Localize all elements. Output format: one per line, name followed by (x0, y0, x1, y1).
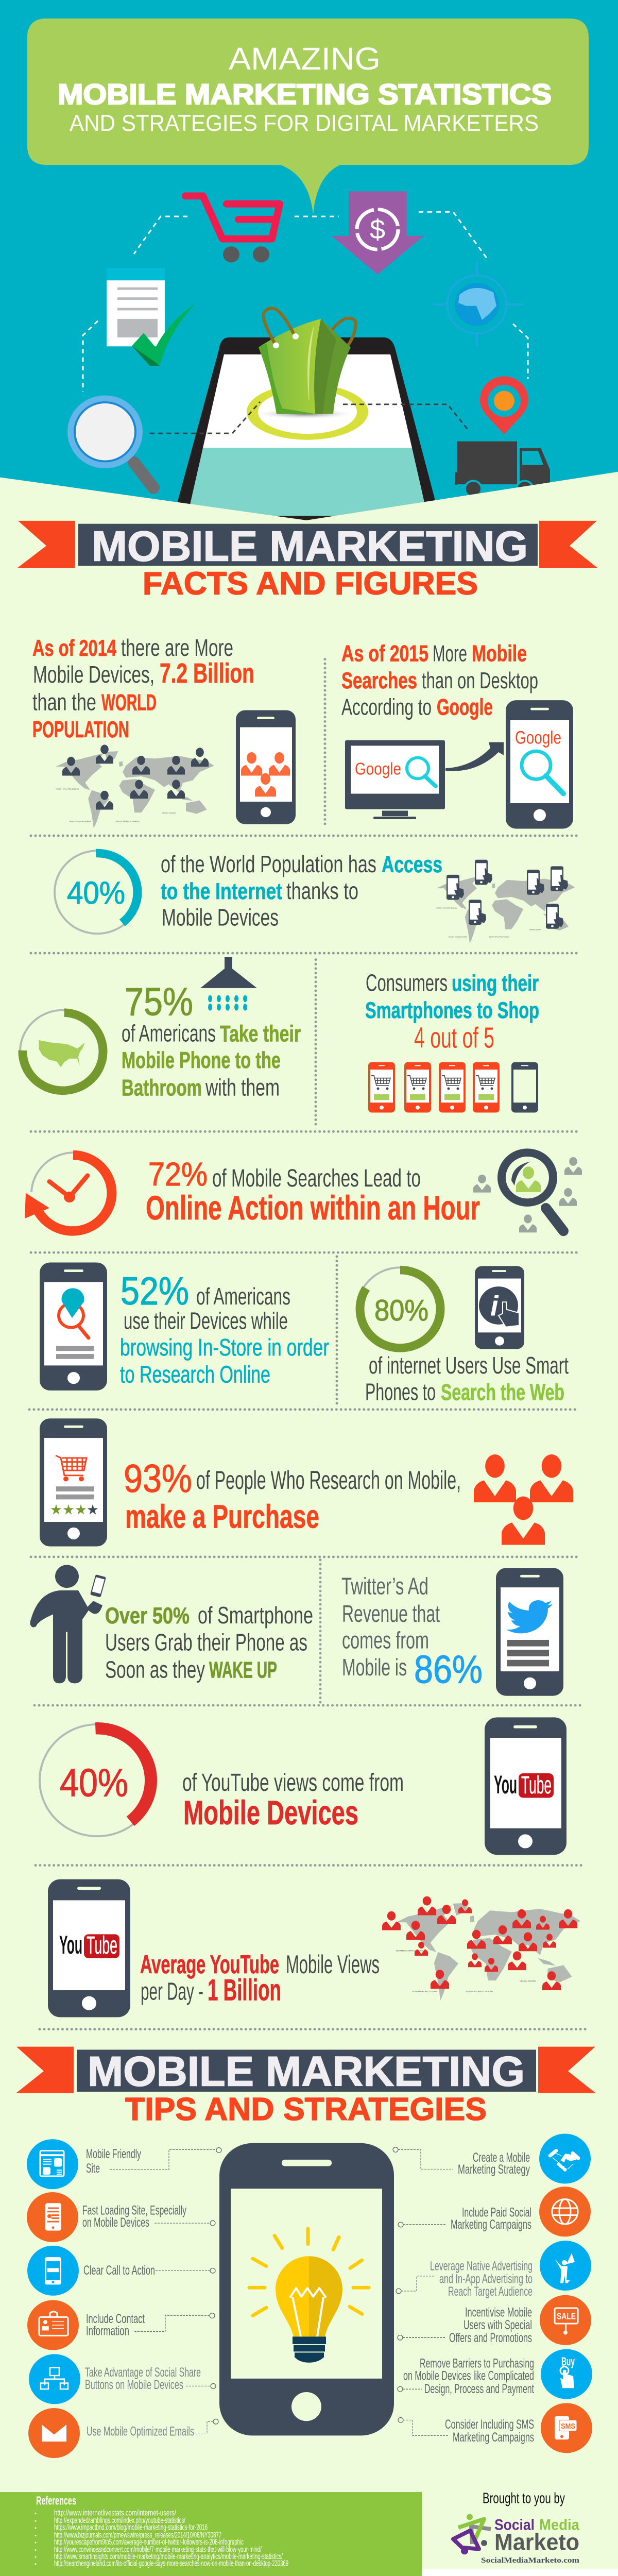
arrow from desktop to mobile (445, 742, 504, 771)
fact: 75 percent bathroom text (122, 980, 301, 1101)
fact: 4 out of 5 consumers text: Smartphones to Shop (365, 997, 539, 1023)
brought to you by credit and logo: SocialMediaMarketo.com (481, 2556, 580, 2565)
fact: twitter revenue text (341, 1573, 483, 1691)
tip: special offers: Incentivise Mobile (465, 2306, 532, 2319)
shopping bag (259, 308, 356, 414)
fact: twitter revenue text: comes from (342, 1627, 429, 1654)
phone with youtube logo (485, 1717, 566, 1855)
horizontal divider (29, 1408, 578, 1411)
section header: facts and figures (18, 521, 597, 601)
fact: 72 percent online action text: of Mobile Searches Lead to (212, 1164, 421, 1192)
phone with info touch icon: i (490, 1290, 499, 1321)
icon: purple dollar arrow: $ (370, 215, 385, 245)
icon: sms phone (555, 2416, 577, 2439)
icon: envelope (42, 2425, 66, 2442)
fact: more mobile searches text: According to (341, 694, 432, 720)
world map with red people (382, 1896, 580, 2001)
tip: special offers: Users with Special (464, 2318, 532, 2332)
fact: 52 percent in-store text (120, 1269, 329, 1388)
fact: 80 percent search text: Phones to (365, 1379, 436, 1405)
fact: 4 out of 5 consumers text (365, 970, 539, 1054)
horizontal divider (31, 835, 579, 837)
brought to you by credit and logo: Marketo (494, 2529, 579, 2555)
fact: 72 percent online action text (146, 1156, 480, 1227)
tip: fast loading site (27, 2192, 215, 2242)
tip: clear call to action: Clear Call to Action (83, 2263, 155, 2278)
icon: purple dollar arrow (332, 192, 424, 275)
fact: wake up text: WAKE UP (209, 1657, 277, 1683)
ring chart: 75 percent with USA map (20, 1010, 106, 1093)
icon: globe network (552, 2199, 578, 2224)
icon: sale sign (555, 2308, 578, 2334)
fact: 4 out of 5 consumers text: Consumers (366, 970, 448, 997)
tip: native and in-app advertising: and In-App Advertising to (439, 2272, 533, 2286)
phone with youtube logo 2: You (59, 1930, 82, 1959)
fact: 7.2 billion devices text: Mobile Devices, (33, 662, 154, 688)
phone with youtube logo 2: Tube (87, 1931, 117, 1959)
tip: create a mobile marketing strategy: Marketing Strategy (458, 2162, 530, 2177)
references panel: http://expandedramblings.com/index.php/youtube-statistics/ (54, 2516, 185, 2525)
tip: social share buttons: Take Advantage of Social Share (85, 2365, 201, 2380)
fact: 72 percent online action text: Online Action within an Hour (146, 1189, 480, 1227)
ring chart: 40 percent youtube views (40, 1724, 155, 1836)
fact: more mobile searches text: As of 2015 (341, 640, 428, 666)
fact: more mobile searches text: Google (437, 694, 493, 720)
icon: handshake (550, 2150, 578, 2172)
phone with cart and stars: ★★★ (50, 1501, 87, 1518)
fact: internet access text: thanks to (286, 878, 358, 905)
fact: 93 percent purchase text: 93% (124, 1457, 192, 1501)
fact: internet access text: to the Internet (161, 878, 282, 904)
icon: man with megaphone (555, 2253, 575, 2283)
fact: wake up text: Users Grab their Phone as (105, 1629, 307, 1656)
tip: include contact information: Information (86, 2324, 129, 2338)
icon: magnifying glass (67, 395, 153, 488)
world map with phones (436, 860, 575, 943)
icon: globe target (434, 261, 522, 347)
tip: create a mobile marketing strategy: Create a Mobile (473, 2150, 530, 2165)
tip: sms marketing campaigns (398, 2403, 592, 2453)
tip: mobile optimized emails (28, 2408, 218, 2458)
fact: twitter revenue text: Twitter’s Ad (341, 1573, 428, 1600)
fact: internet access text: of the World Population has (161, 851, 376, 878)
desktop monitor with google search: Google (355, 760, 401, 779)
fact: 7.2 billion devices text: As of 2014 (32, 635, 116, 661)
fact: 75 percent bathroom text: Mobile Phone to the (122, 1047, 281, 1073)
icon: man holding phone (30, 1565, 106, 1683)
tip: create a mobile marketing strategy (393, 2133, 591, 2183)
brought to you by credit and logo: Brought to you by (483, 2490, 565, 2506)
tip: native and in-app advertising: Reach Target Audience (448, 2284, 533, 2299)
brought to you by credit and logo (453, 2490, 580, 2565)
references panel: References (36, 2495, 76, 2507)
fact: 7.2 billion devices text: than the (32, 689, 96, 716)
icon: light bulb (249, 2229, 369, 2363)
phone with audience icon (236, 710, 296, 824)
fact: wake up text: of Smartphone (198, 1602, 313, 1629)
icon: phone button (45, 2257, 61, 2284)
speech bubble title panel: MOBILE MARKETING STATISTICS (58, 78, 552, 110)
vertical divider (314, 960, 317, 1128)
icon: id badge (39, 2312, 68, 2335)
references panel: https://www.impactbnd.com/blog/mobile-marketing-statistics-for-2016 (54, 2523, 208, 2532)
fact: 1 billion views text: per Day - (141, 1977, 203, 2005)
phone with youtube logo 2 (48, 1879, 130, 2017)
phone with info touch icon (475, 1266, 524, 1349)
dashed connector lines (83, 212, 528, 392)
fact: 52 percent in-store text: use their Devices while (124, 1308, 288, 1334)
tip: social share buttons (29, 2354, 216, 2404)
fact: youtube views text: of YouTube views come from (182, 1769, 404, 1797)
tip: social share buttons: Buttons on Mobile Devices (85, 2378, 183, 2392)
tip: native and in-app advertising (396, 2241, 591, 2299)
references panel: http://www.internetlivestats.com/internet-users/ (54, 2509, 176, 2518)
tip: mobile friendly site: Mobile Friendly (86, 2147, 141, 2161)
phone with google search (506, 700, 573, 828)
fact: twitter revenue text: 86% (414, 1648, 483, 1691)
phone with youtube logo: You (494, 1770, 517, 1799)
fact: wake up text: Soon as they (105, 1656, 205, 1684)
world map with people (56, 744, 214, 828)
fact: 80 percent search text: Search the Web (441, 1379, 564, 1405)
fact: 75 percent bathroom text: Bathroom (122, 1075, 202, 1100)
tip: include contact information (27, 2300, 215, 2350)
row of phones with carts (368, 1062, 538, 1112)
logo mark (453, 2514, 491, 2554)
phone with cart and stars (40, 1418, 107, 1547)
tip: remove purchase barriers (398, 2349, 592, 2399)
section header: tips and strategies: TIPS AND STRATEGIES (125, 2092, 487, 2127)
icon: three people (474, 1454, 573, 1545)
phone with search pin (40, 1263, 107, 1391)
fact: wake up text (105, 1602, 313, 1684)
fact: wake up text: Over 50% (105, 1603, 190, 1629)
fact: 75 percent bathroom text: of Americans (122, 1020, 216, 1047)
tip: fast loading site: Fast Loading Site, Especially (82, 2204, 186, 2218)
icon: phone layout (45, 2203, 61, 2231)
icon: magnifier over people (473, 1153, 582, 1232)
references panel: http://www.bizjournals.com/prnewswire/press_releases/2014/10/06/NY30877 (54, 2531, 221, 2539)
brought to you by credit and logo: Social (494, 2516, 535, 2534)
fact: youtube views text: Mobile Devices (183, 1794, 358, 1832)
references panel: http://www.convinceandconvert.com/mobile/7-mobile-marketing-stats-that-will-blow-your-mind/ (54, 2546, 262, 2554)
fact: 75 percent bathroom text: with them (205, 1074, 280, 1101)
tip: remove purchase barriers: on Mobile Devices like Complicated (403, 2369, 534, 2383)
icon: org chart (41, 2367, 68, 2389)
fact: 80 percent search text (365, 1352, 569, 1405)
horizontal divider (31, 1555, 579, 1558)
fact: twitter revenue text: Revenue that (342, 1601, 440, 1628)
phone with google search: Google (515, 727, 561, 748)
icon: sale sign: SALE (557, 2311, 576, 2321)
tip: paid social marketing: Marketing Campaigns (451, 2217, 531, 2232)
section header: facts and figures: FACTS AND FIGURES (143, 566, 478, 601)
fact: 7.2 billion devices text: 7.2 Billion (160, 658, 254, 689)
tip: special offers (398, 2295, 591, 2345)
tip: mobile friendly site: Site (86, 2161, 100, 2176)
icon: sms phone: SMS (561, 2422, 575, 2431)
horizontal divider (31, 952, 579, 955)
central phone with light bulb (219, 2143, 394, 2435)
ring chart: 80 percent (357, 1267, 443, 1350)
fact: 52 percent in-store text: to Research Online (120, 1361, 270, 1388)
icon: location pin (480, 377, 528, 434)
fact: more mobile searches text: than on Desktop (422, 667, 538, 693)
tip: paid social marketing: Include Paid Social (462, 2206, 531, 2219)
tip: mobile friendly site (27, 2139, 221, 2189)
fact: more mobile searches text: Mobile (472, 640, 527, 666)
fact: 93 percent purchase text (124, 1457, 461, 1535)
icon: clock with circular arrow (25, 1153, 112, 1231)
fact: internet access text: Access (382, 851, 442, 877)
icon: delivery truck (455, 442, 550, 497)
tip: native and in-app advertising: Leverage Native Advertising (430, 2259, 533, 2273)
fact: 52 percent in-store text: of Americans (196, 1283, 290, 1310)
fact: more mobile searches text: Searches (341, 667, 417, 693)
tip: remove purchase barriers: Design, Process and Payment (424, 2382, 534, 2396)
tip: sms marketing campaigns: Consider Including SMS (445, 2417, 534, 2432)
tip: remove purchase barriers: Remove Barriers to Purchasing (420, 2357, 534, 2370)
fact: 75 percent bathroom text: Take their (220, 1021, 301, 1047)
icon: shopping cart (185, 196, 280, 262)
vertical divider (319, 1560, 321, 1705)
phone with cart and stars: ★ (87, 1501, 99, 1518)
icon: document with check mark (107, 268, 195, 366)
references panel: http://searchengineland.com/its-official-google-says-more-searches-now-on-mobile-than-on-desktop-220369 (54, 2560, 288, 2568)
fact: more mobile searches text (341, 640, 538, 720)
section header: tips and strategies (16, 2047, 596, 2127)
fact: 7.2 billion devices text (32, 634, 254, 742)
section header: facts and figures: MOBILE MARKETING (92, 522, 528, 570)
speech bubble title panel: AND STRATEGIES FOR DIGITAL MARKETERS (70, 110, 539, 136)
fact: more mobile searches text: More (433, 640, 467, 666)
vertical divider (336, 1257, 338, 1405)
desktop monitor with google search (345, 740, 445, 819)
references panel (0, 2492, 422, 2576)
fact: 72 percent online action text: 72% (148, 1156, 208, 1193)
section header: tips and strategies: MOBILE MARKETING (88, 2047, 525, 2095)
tip: clear call to action (27, 2246, 215, 2296)
fact: 52 percent in-store text: browsing In-Store in order (120, 1334, 329, 1361)
fact: 7.2 billion devices text: there are More (121, 634, 233, 662)
icon: buy button hand (560, 2355, 575, 2388)
speech bubble title panel: AMAZING (229, 42, 381, 77)
fact: 1 billion views text: 1 Billion (208, 1973, 281, 2007)
phone with twitter bird (496, 1568, 563, 1696)
icon: buy button hand: Buy (561, 2355, 575, 2368)
ring chart: 40 percent youtube views: 40% (60, 1761, 128, 1805)
hero illustration (0, 0, 618, 530)
horizontal divider (31, 1251, 579, 1254)
tip: sms marketing campaigns: Marketing Campaigns (453, 2430, 534, 2445)
tip: include contact information: Include Contact (86, 2312, 145, 2326)
fact: 1 billion views text (140, 1950, 380, 2007)
fact: 7.2 billion devices text: WORLD (101, 689, 157, 715)
vertical divider (323, 659, 327, 828)
fact: twitter revenue text: Mobile is (342, 1654, 407, 1681)
fact: 4 out of 5 consumers text: 4 out of 5 (414, 1022, 494, 1054)
fact: youtube views text (182, 1769, 404, 1832)
ring chart: 80 percent: 80% (374, 1294, 428, 1327)
ring chart: 40 percent internet access (55, 851, 140, 934)
fact: internet access text: Mobile Devices (162, 904, 279, 931)
icon: shower head (200, 957, 257, 1011)
fact: 93 percent purchase text: make a Purchase (125, 1498, 319, 1535)
phone with youtube logo: Tube (521, 1771, 552, 1799)
brought to you by credit and logo: Media (539, 2516, 580, 2534)
references panel: http://www.smartinsights.com/mobile-marketing/mobile-marketing-analytics/mobile-marketing-statistics/ (54, 2552, 283, 2561)
white strip at bottom right (422, 2569, 618, 2576)
fact: 4 out of 5 consumers text: using their (452, 970, 539, 996)
fact: 1 billion views text: Mobile Views (286, 1950, 380, 1979)
horizontal divider (40, 2028, 589, 2030)
ring chart: 40 percent internet access: 40% (67, 876, 125, 911)
fact: 93 percent purchase text: of People Who Research on Mobile, (196, 1466, 461, 1495)
fact: 75 percent bathroom text: 75% (125, 980, 193, 1024)
tip: special offers: Offers and Promotions (449, 2331, 532, 2345)
horizontal divider (31, 1130, 579, 1133)
fact: 7.2 billion devices text: POPULATION (32, 717, 129, 742)
tip: mobile optimized emails: Use Mobile Optimized Emails (87, 2425, 194, 2438)
icon: tablet with shopping bag (150, 308, 468, 530)
icon: web page (40, 2150, 64, 2176)
speech bubble title panel (27, 19, 589, 214)
fact: 52 percent in-store text: 52% (121, 1269, 189, 1313)
references panel: http://yourescapefrom9to5.com/average-number-of-twitter-followers-is-208-infographic (54, 2538, 244, 2547)
fact: internet access text (161, 851, 442, 931)
tip: paid social marketing (398, 2187, 591, 2236)
fact: 1 billion views text: Average YouTube (140, 1950, 279, 1979)
tip: fast loading site: on Mobile Devices (82, 2215, 149, 2230)
horizontal divider (35, 1704, 583, 1707)
horizontal divider (36, 1864, 585, 1867)
